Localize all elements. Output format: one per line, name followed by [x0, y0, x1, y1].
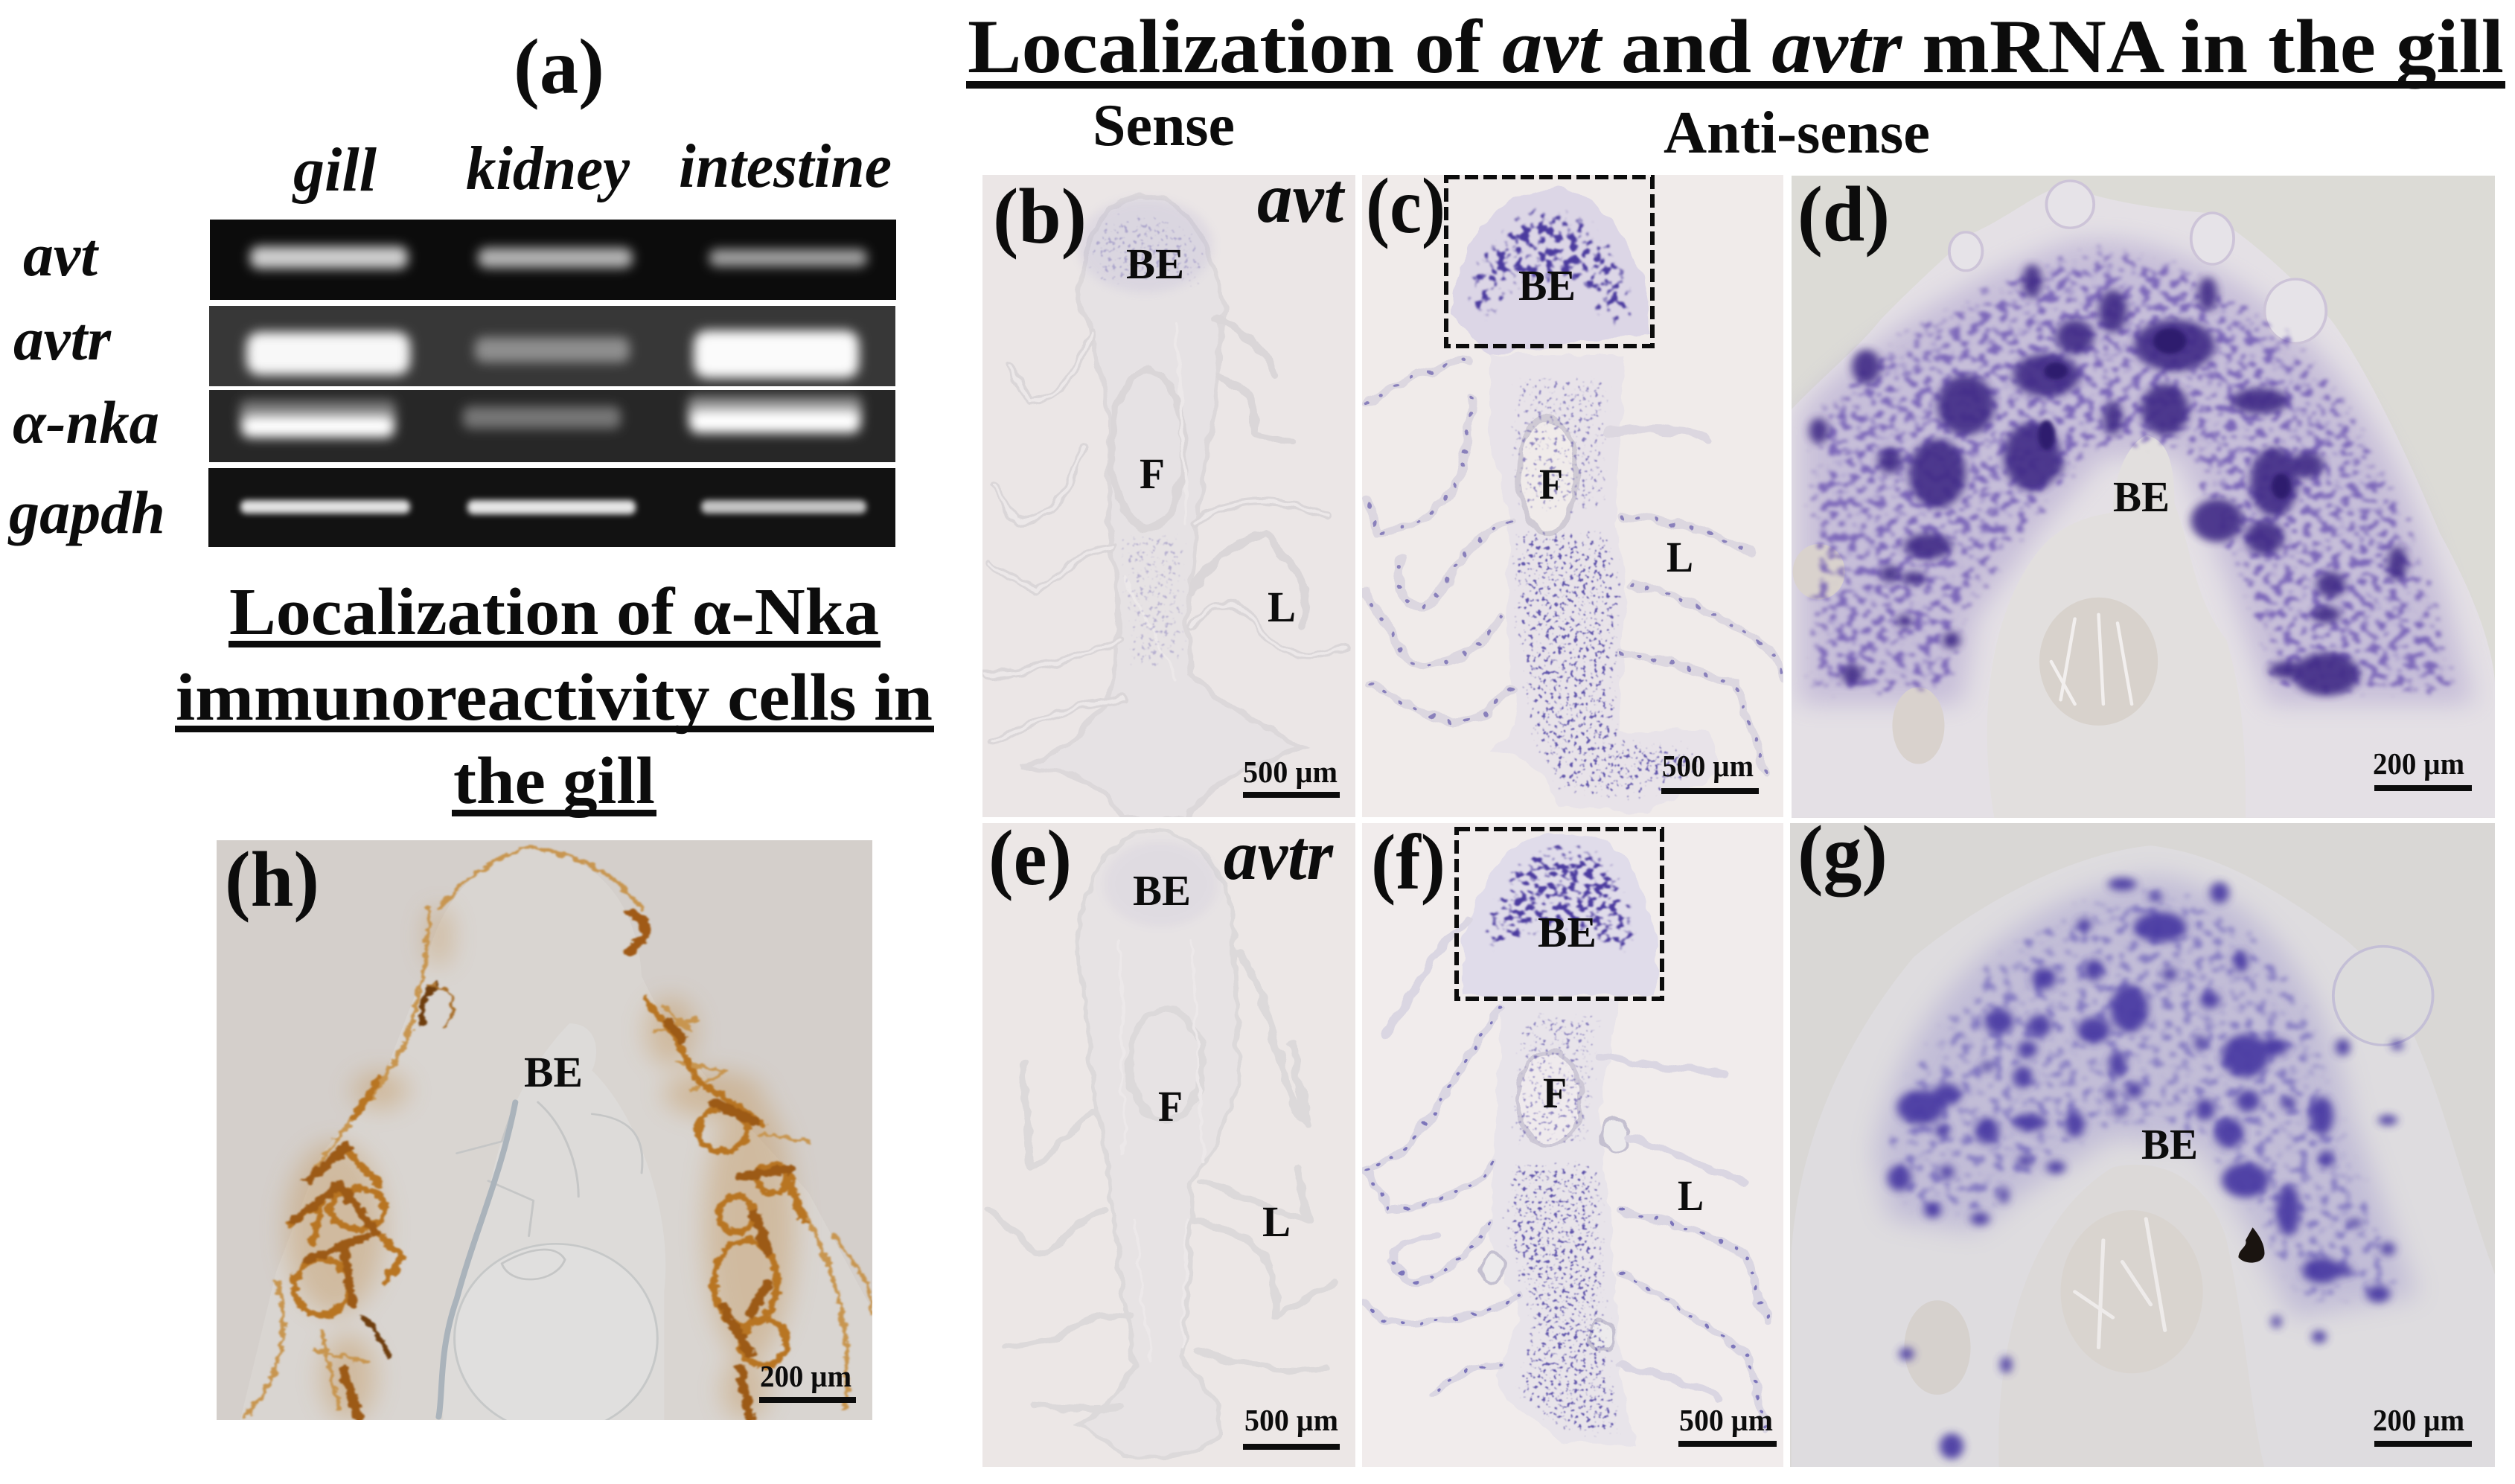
panel (a): RT-PCR gel: [7, 23, 896, 547]
panel (b): avt sense section: [982, 159, 1355, 819]
label (f): (f): [1371, 819, 1445, 906]
scale bar: 500 µm: [1244, 1403, 1338, 1437]
gel row: avtr: [209, 306, 895, 386]
gene labels: gapdh: [7, 479, 165, 546]
panel (c): avt anti-sense section: [1362, 162, 1786, 817]
label (a): (a): [514, 23, 604, 110]
micrograph c: [1362, 175, 1786, 817]
tissue label: BE: [2141, 1120, 2198, 1168]
column headings: kidney: [466, 134, 630, 203]
label (d): (d): [1797, 170, 1890, 258]
tissue labels: [1538, 908, 1704, 1220]
tissue labels: L: [1262, 1197, 1291, 1246]
panel (h): alpha-Nka immunoreactivity: [217, 836, 872, 1433]
column headings: [292, 132, 892, 205]
label (c): (c): [1366, 162, 1445, 249]
tissue labels: L: [1666, 533, 1693, 581]
tissue labels: BE: [1518, 261, 1576, 310]
heading: localization of alpha-Nka: Localization of α-Nka: [229, 575, 879, 649]
dashed inset box: [1446, 177, 1652, 346]
micrograph h: [217, 840, 872, 1433]
gel row: alpha-nka: [209, 390, 895, 462]
column headings: intestine: [679, 132, 892, 201]
gene labels: [7, 221, 165, 546]
heading: localization of alpha-Nka: the gill: [453, 744, 655, 818]
tissue labels: [1518, 261, 1693, 581]
scale bar: 200 µm: [760, 1359, 851, 1393]
tissue label: BE: [2113, 473, 2170, 521]
gene label avtr: avtr: [1224, 816, 1334, 895]
tissue labels: F: [1539, 460, 1563, 508]
tissue labels: L: [1268, 583, 1296, 631]
label (g): (g): [1797, 810, 1888, 897]
scale bar: 500 µm: [1662, 749, 1754, 783]
micrograph b: [982, 175, 1355, 819]
scale bar: 500 µm: [1243, 755, 1338, 789]
gel row: avt: [210, 220, 896, 300]
tissue labels: BE: [1538, 908, 1597, 956]
panel (g): avtr enlarged: [1790, 810, 2495, 1468]
heading: localization of alpha-Nka: immunoreactivity cells in: [176, 661, 933, 735]
micrograph g: [1790, 823, 2495, 1468]
panel (e): avtr sense section: [982, 814, 1355, 1467]
dashed inset box: [1457, 829, 1662, 999]
label (b): (b): [993, 173, 1087, 260]
micrograph e: [982, 823, 1355, 1467]
column heading: sense: Sense: [1093, 93, 1235, 159]
label (e): (e): [988, 814, 1072, 901]
label (h): (h): [225, 836, 319, 923]
scale bar: 200 µm: [2373, 746, 2464, 781]
micrograph f: [1362, 823, 1783, 1467]
column heading: anti-sense: Anti-sense: [1664, 100, 1930, 166]
tissue labels: L: [1678, 1171, 1704, 1220]
tissue labels: F: [1543, 1069, 1567, 1117]
gene label avt: avt: [1257, 159, 1346, 237]
tissue labels: [1133, 866, 1291, 1246]
main title: Localization of avt and avtr mRNA in the gill: [968, 4, 2504, 89]
panel (d): avt enlarged: [1792, 170, 2495, 818]
gene labels: avtr: [13, 305, 112, 373]
tissue labels: F: [1140, 450, 1165, 498]
scale bar: 200 µm: [2373, 1403, 2464, 1437]
gene labels: α-nka: [13, 388, 159, 456]
heading: localization of alpha-Nka: [175, 575, 934, 818]
gel row: gapdh: [208, 468, 895, 547]
tissue labels: [1126, 240, 1296, 631]
panel (f): avtr anti-sense section: [1362, 819, 1783, 1467]
tissue label: BE: [524, 1048, 583, 1096]
gene labels: avt: [23, 221, 99, 289]
tissue labels: BE: [1133, 866, 1191, 915]
tissue labels: F: [1158, 1082, 1183, 1130]
scale bar: 500 µm: [1679, 1403, 1773, 1437]
tissue labels: BE: [1126, 240, 1184, 288]
micrograph d: [1792, 176, 2495, 818]
column headings: gill: [292, 135, 377, 205]
